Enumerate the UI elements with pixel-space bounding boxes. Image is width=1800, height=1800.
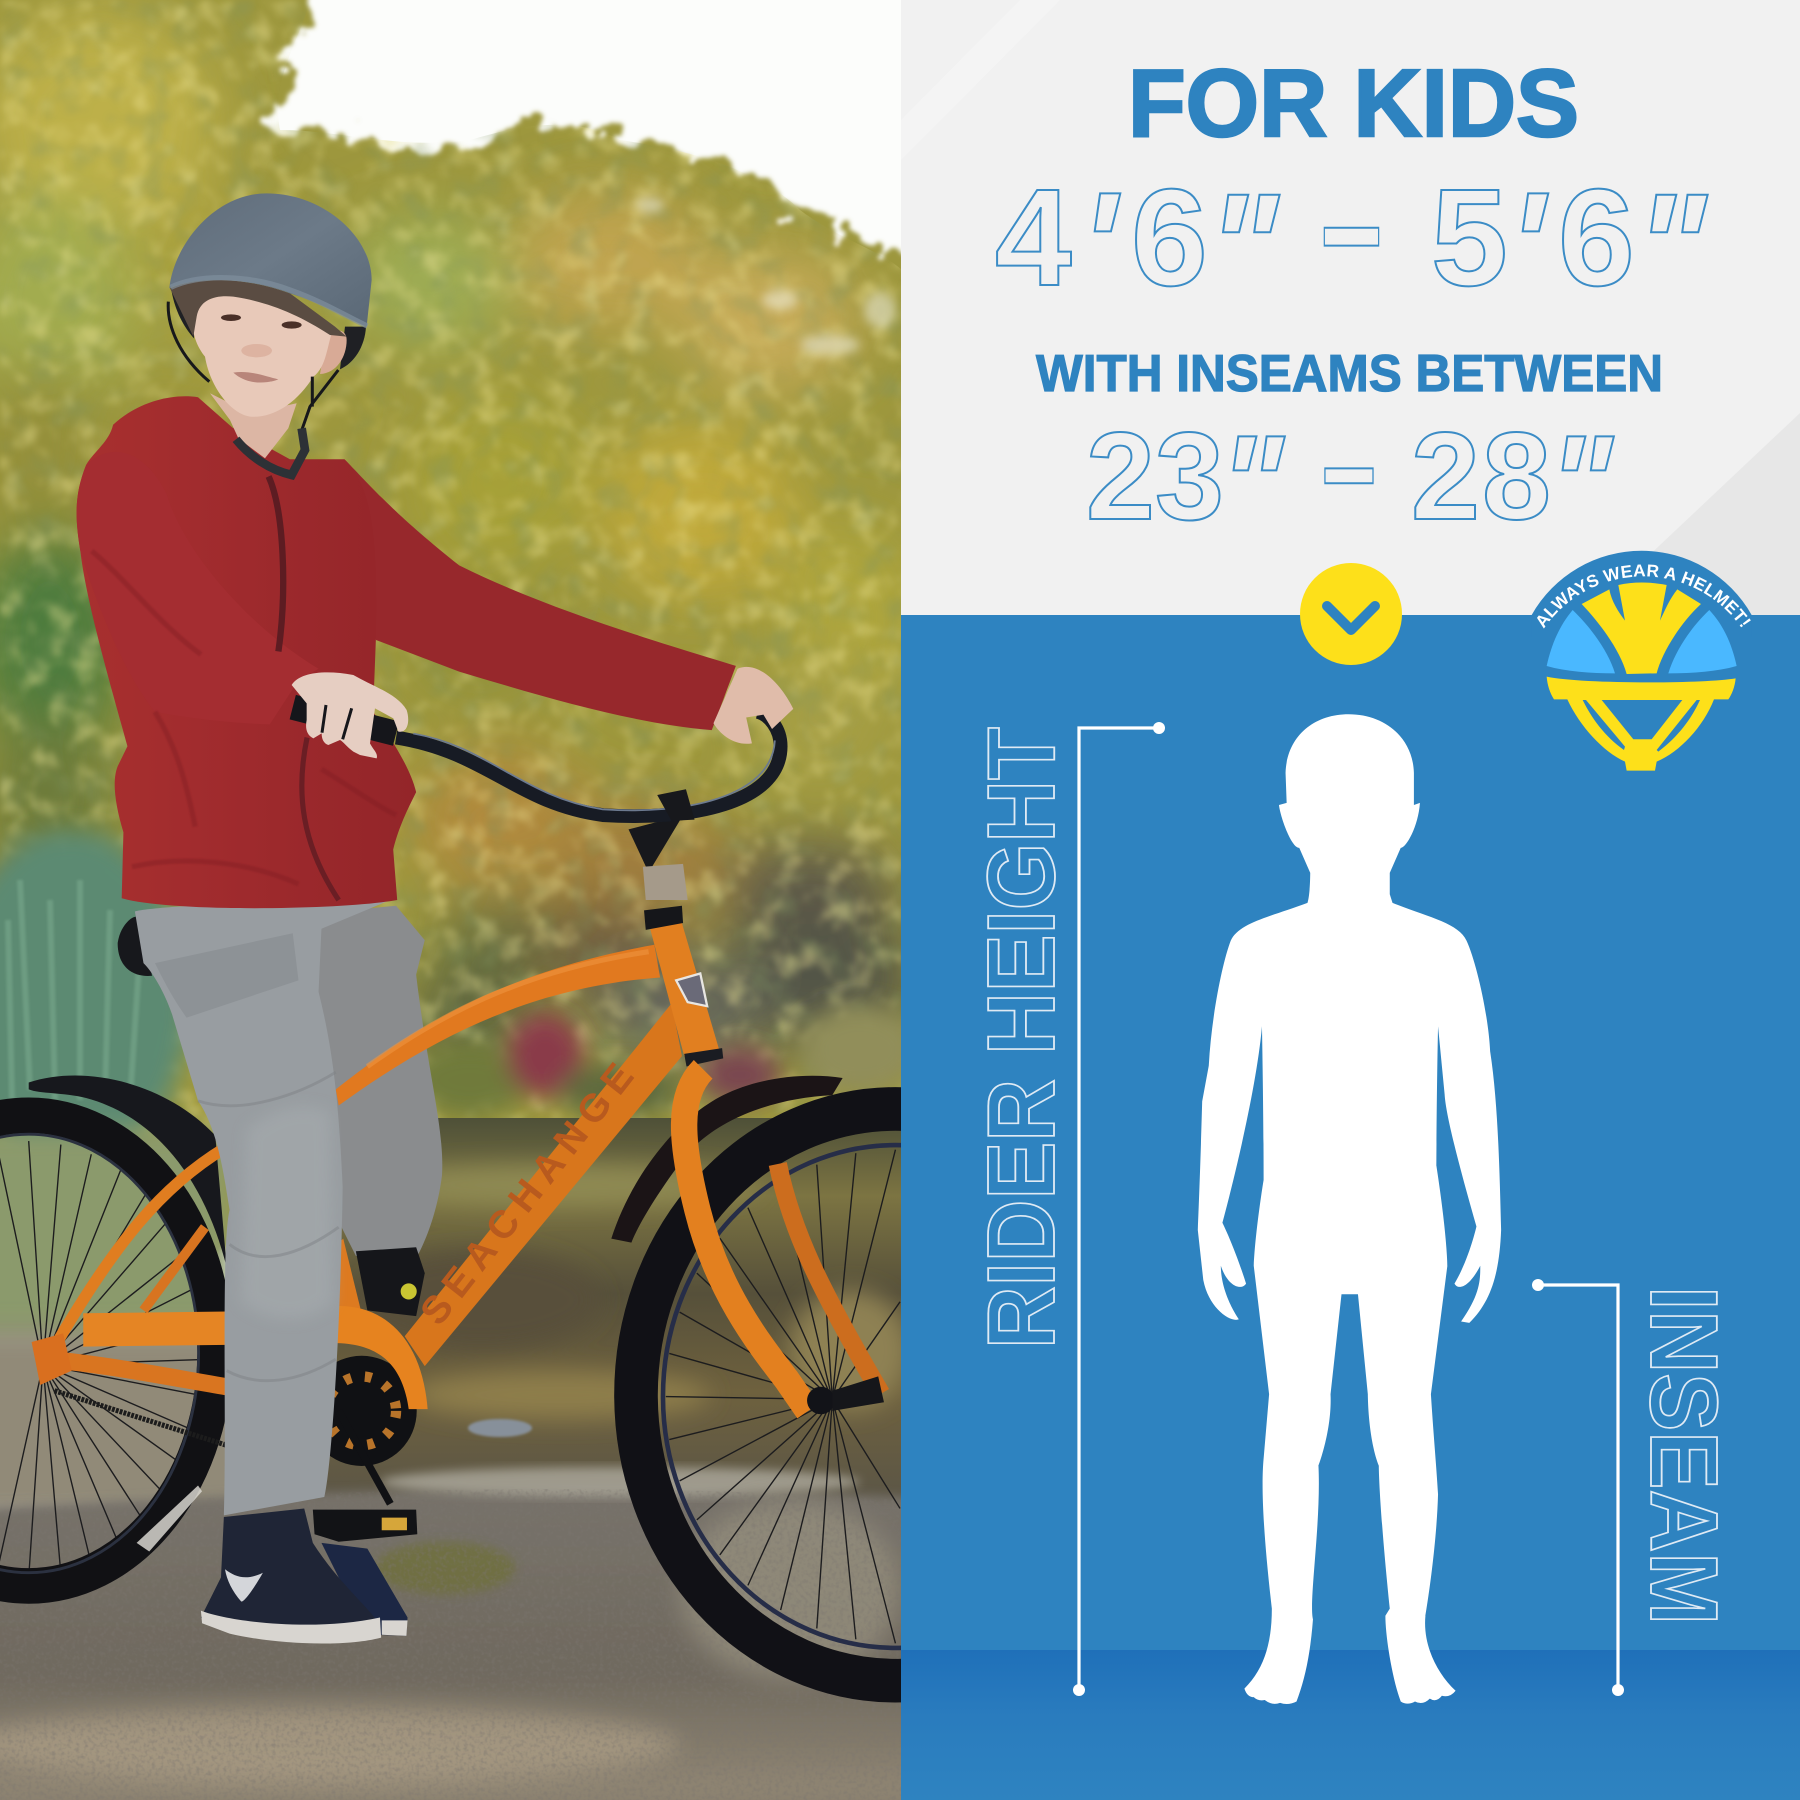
ear (320, 331, 347, 374)
helmet brim highlight (171, 278, 367, 326)
boy: near hand (292, 672, 408, 758)
boy: far hand (713, 667, 793, 744)
front fender (611, 1076, 843, 1243)
rear bicycle wheel (0, 1115, 215, 1586)
panel: photo of boy on orange bike (0, 0, 901, 1800)
height range: " (1635, 162, 1708, 330)
gravel ground (0, 1467, 960, 1800)
zipper bottom (302, 738, 339, 900)
inseam range: 3 (1155, 408, 1224, 546)
pants: front leg (135, 900, 390, 1515)
crank and lower pedal (339, 1411, 390, 1504)
top tube (336, 945, 660, 1105)
icon: always wear a helmet badge (1532, 550, 1752, 771)
head badge (676, 973, 707, 1006)
inseam measure line (1532, 1279, 1624, 1696)
icon: child silhouette (1198, 714, 1501, 1704)
height range: 5 (1431, 161, 1508, 315)
label: inseam: INSEAM (1630, 1286, 1737, 1625)
inseam range: 2 (1086, 408, 1155, 546)
height range: 6 (1131, 161, 1208, 315)
helmet right panel (1668, 610, 1737, 673)
sky background (0, 0, 902, 700)
rear stays (57, 1148, 225, 1342)
helmet underside (172, 287, 366, 369)
upper pedal (356, 1247, 425, 1316)
height range: 4 (995, 161, 1072, 315)
neck (210, 393, 297, 458)
hoodie body (77, 396, 416, 908)
eyes (221, 314, 241, 321)
inseam range: " (1548, 407, 1614, 559)
boy: torso and arms in red hoodie (77, 396, 736, 908)
sneakers (201, 1508, 408, 1644)
front bicycle wheel (614, 1087, 901, 1702)
panel: light header background (901, 0, 1800, 616)
helmet visor and straps (1547, 677, 1736, 771)
height measure line (1073, 722, 1165, 1696)
right eye (282, 321, 302, 329)
inseam range: 2 (1411, 408, 1480, 546)
second fork blade (778, 1164, 881, 1394)
helmet left panel (1547, 610, 1615, 673)
nose (241, 344, 272, 357)
chainring (307, 1356, 417, 1466)
front hub (807, 1387, 835, 1414)
zipper top (269, 476, 283, 651)
pants: back leg (318, 906, 442, 1256)
height range: ' (1080, 161, 1121, 331)
height range: " (1207, 162, 1280, 330)
height range: ' (1508, 161, 1549, 331)
helmet straps (168, 302, 338, 433)
far arm (344, 459, 736, 730)
reeds on the left (0, 819, 230, 1513)
lakeside bushes (410, 1005, 920, 1118)
chin strap (236, 428, 305, 475)
handlebar (293, 707, 781, 900)
inseam range: 8 (1482, 408, 1551, 546)
face (192, 286, 333, 417)
hoodie folds (92, 551, 396, 884)
badge arch (1532, 551, 1752, 637)
head tube (649, 917, 720, 1056)
chainguard (330, 1306, 428, 1409)
inseam range (1086, 380, 1614, 559)
label: rider height: RIDER HEIGHT (968, 727, 1075, 1349)
floor band (901, 1650, 1800, 1800)
orange bicycle frame (29, 906, 884, 1542)
subheading: with inseams between: WITH INSEAMS BETWEEN (1036, 345, 1663, 403)
brand text on down tube: SEACHANGE (412, 1056, 642, 1333)
inseam range: " (1219, 407, 1285, 559)
badge text: ALWAYS WEAR A HELMET! (1537, 564, 1751, 628)
icon: yellow chevron badge (1300, 563, 1402, 665)
height range: – (1321, 123, 1382, 324)
helmet center panel (1582, 582, 1701, 674)
lake water (280, 1118, 910, 1508)
main fork blade (684, 1069, 808, 1411)
near sleeve (77, 452, 319, 724)
down tube (405, 1003, 682, 1366)
hair under brim (170, 280, 347, 337)
foliage background (0, 0, 960, 1250)
saddle (118, 917, 152, 976)
heading: for kids: FOR KIDS (1128, 50, 1579, 157)
boy: head and helmet (168, 193, 372, 475)
seat tube (330, 1239, 360, 1309)
height range (995, 123, 1708, 331)
panel: blue measurement background (901, 615, 1800, 1800)
inseam range: – (1322, 380, 1376, 548)
mouth (233, 372, 278, 383)
height range: 6 (1558, 161, 1635, 315)
helmet shell (169, 193, 372, 327)
rear fender (29, 1076, 227, 1267)
grip (293, 707, 396, 734)
